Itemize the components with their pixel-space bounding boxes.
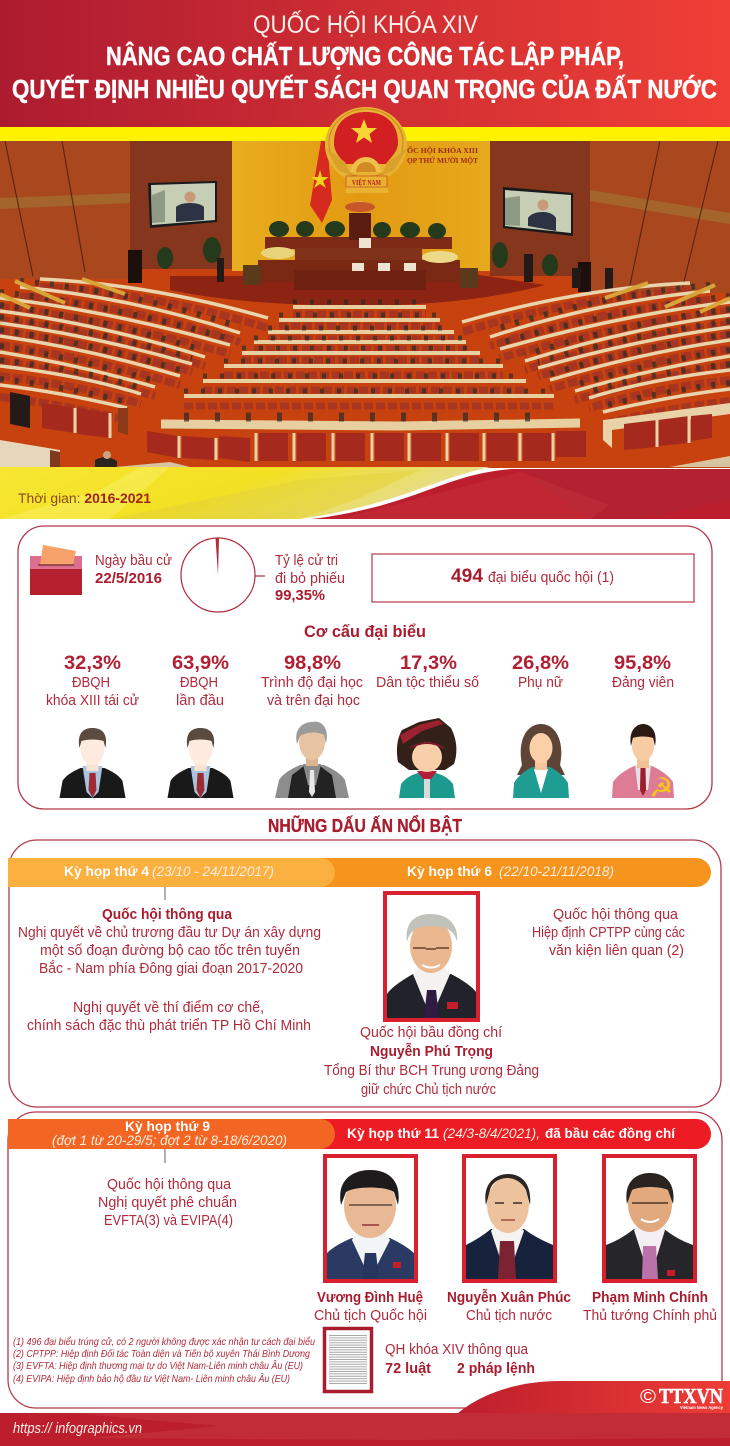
front row chairs [10, 392, 730, 462]
portrait: Nguyễn Xuân Phúc [464, 1156, 555, 1281]
laws passed: QH khóa XIV thông qua [385, 1341, 529, 1358]
session bar: Kỳ họp thứ 6 [407, 863, 492, 879]
icon: woman [513, 724, 569, 798]
title: NÂNG CAO CHẤT LƯỢNG CÔNG TÁC LẬP PHÁP, [106, 41, 624, 71]
session bar [8, 858, 711, 887]
stat: party members [612, 653, 674, 691]
stat: first time: ĐBQH [180, 674, 218, 691]
stat: higher education [261, 653, 363, 709]
footnotes [13, 1336, 315, 1385]
session bar: Kỳ họp thứ 11 [347, 1125, 439, 1141]
deputies count box [372, 554, 694, 602]
laws passed: 72 luật [385, 1360, 431, 1377]
icon: man in suit 2 [168, 728, 234, 798]
logo: TTXVN [640, 1384, 723, 1410]
stat: first time: 63,9% [172, 653, 229, 674]
stat: re-elected [46, 653, 139, 709]
left screen [148, 181, 217, 228]
session bar: đã bầu các đồng chí [545, 1125, 676, 1141]
right seating block [462, 283, 730, 424]
election date: Ngày bầu cử [95, 552, 172, 569]
session 6 text: Hiệp định CPTPP cùng các [532, 924, 685, 941]
election text: Quốc hội bầu đồng chí [360, 1024, 503, 1041]
header banner [0, 0, 730, 127]
session bar: (24/3-8/4/2021), [443, 1125, 540, 1141]
portrait: Nguyễn Phú Trọng [385, 893, 478, 1020]
icon: party member: ☭ [649, 773, 673, 804]
election text: Tổng Bí thư BCH Trung ương Đảng [324, 1062, 539, 1079]
stat: women: 26,8% [512, 653, 569, 674]
wall inscription: ỐC HỘI KHÓA XIII [407, 145, 478, 155]
session bar: (đợt 1 từ 20-29/5; đợt 2 từ 8-18/6/2020) [52, 1132, 287, 1148]
session 6 text: Quốc hội thông qua [553, 906, 679, 923]
stat: higher education: 98,8% [284, 653, 341, 674]
left side chairs [10, 392, 128, 438]
stat: first time: lần đầu [176, 692, 224, 709]
panel: sessions 4 and 6 [8, 840, 721, 1107]
portrait: Vương Đình Huệ [325, 1156, 416, 1281]
session 4 text: Nghị quyết về thí điểm cơ chế, [73, 999, 264, 1016]
election date [95, 552, 172, 587]
icon: party member [612, 724, 674, 804]
turnout text: Tỷ lệ cử tri [275, 552, 338, 569]
wall inscription [407, 145, 478, 165]
footer url: https:// infographics.vn [13, 1420, 142, 1437]
session 4 text [18, 906, 321, 1034]
national emblem: VIỆT NAM [352, 179, 381, 187]
session bar: Kỳ họp thứ 4 [64, 863, 149, 879]
footnotes: (3) EVFTA: Hiệp định thương mại tự do Việt Nam-Liên minh châu Âu (EU) [13, 1359, 303, 1372]
logo: TTXVN: Vietnam News Agency [680, 1405, 723, 1410]
session 6 text [532, 906, 685, 959]
stat: re-elected: ĐBQH [72, 674, 110, 691]
session 4 text: một số đoạn đường bộ cao tốc trên tuyến [40, 942, 300, 959]
photo: National Assembly hall [0, 141, 730, 468]
stat: re-elected: 32,3% [64, 653, 121, 674]
portrait: Phạm Minh Chính [604, 1156, 695, 1281]
stat: first time [172, 653, 229, 709]
captions: leaders [314, 1289, 717, 1324]
session 9 text: Quốc hội thông qua [107, 1176, 232, 1193]
section heading: highlights: NHỮNG DẤU ẤN NỔI BẬT [268, 815, 462, 836]
captions: leaders: Thủ tướng Chính phủ [583, 1307, 717, 1324]
deputies count box: đại biểu quốc hội (1) [488, 569, 614, 586]
stat: higher education: và trên đại học [267, 692, 360, 709]
laws passed: 2 pháp lệnh [457, 1360, 535, 1377]
flag [310, 141, 332, 223]
stat: party members: Đảng viên [612, 674, 674, 691]
session 4 text: Nghị quyết về chủ trương đầu tư Dự án xây dựng [18, 924, 321, 941]
stat: women [512, 653, 569, 691]
laws passed [385, 1341, 535, 1377]
time band [0, 467, 730, 519]
deputies count box: 494 [451, 566, 483, 587]
session 6 text: văn kiện liên quan (2) [549, 942, 684, 959]
stat: ethnic minorities [376, 653, 480, 691]
icon: grey haired man [275, 722, 349, 798]
national emblem [325, 107, 407, 193]
panel: election and composition [18, 526, 712, 809]
turnout text: đi bỏ phiếu [275, 570, 345, 587]
captions: leaders: Vương Đình Huệ [317, 1289, 423, 1306]
time label: Thời gian: 2016-2021 [18, 490, 151, 506]
captions: leaders: Chủ tịch nước [466, 1307, 552, 1324]
people standing on stage [217, 254, 613, 292]
session 4 text: chính sách đặc thù phát triển TP Hồ Chí Minh [27, 1017, 311, 1034]
yellow stripe [0, 127, 730, 141]
icon: ballot box [30, 545, 82, 595]
election text [324, 1024, 539, 1098]
footnotes: (2) CPTPP: Hiệp định Đối tác Toàn diện và Tiến bộ xuyên Thái Bình Dương [13, 1348, 310, 1360]
pie chart: turnout 99.35% [181, 538, 265, 612]
stat: ethnic minorities: 17,3% [400, 653, 457, 674]
captions: leaders: Phạm Minh Chính [592, 1289, 708, 1306]
stat: party members: 95,8% [614, 653, 671, 674]
captions: leaders: Nguyễn Xuân Phúc [447, 1289, 571, 1306]
title: QUỐC HỘI KHÓA XIV [253, 9, 478, 39]
icon: law document [324, 1328, 372, 1392]
left seating block [0, 279, 268, 420]
right side chairs [603, 403, 730, 450]
captions: leaders: Chủ tịch Quốc hội [314, 1307, 427, 1324]
turnout text [275, 552, 345, 604]
bottom corner desks [0, 440, 730, 467]
icon: man in suit [60, 728, 126, 798]
plants [157, 221, 558, 276]
icon: ethnic minority woman [397, 718, 456, 798]
footnotes: (1) 496 đại biểu trúng cử, có 2 người không được xác nhận tư cách đại biểu [13, 1336, 315, 1348]
centre seating block [161, 302, 580, 426]
session bar [8, 1118, 711, 1149]
session bar: (22/10-21/11/2018) [499, 863, 614, 879]
stat: women: Phụ nữ [518, 674, 563, 691]
title [12, 9, 717, 104]
logo: TTXVN: © [640, 1387, 656, 1408]
turnout text: 99,35% [275, 587, 325, 604]
election text: Nguyễn Phú Trọng [370, 1043, 493, 1060]
stage [170, 201, 545, 306]
wall inscription: ỌP THỨ MƯỜI MỘT [407, 155, 478, 165]
footnotes: (4) EVIPA: Hiệp định bảo hộ đầu tư Việt Nam- Liên minh châu Âu (EU) [13, 1372, 290, 1385]
heading: composition: Cơ cấu đại biểu [304, 622, 426, 641]
session 9 text [98, 1176, 237, 1229]
session 9 text: EVFTA(3) và EVIPA(4) [104, 1212, 233, 1229]
election text: giữ chức Chủ tịch nước [361, 1081, 496, 1098]
right screen [503, 187, 573, 236]
session 4 text: Bắc - Nam phía Đông giai đoạn 2017-2020 [39, 960, 303, 977]
footer band [0, 1381, 730, 1446]
photo walls [0, 141, 730, 293]
session 4 text: Quốc hội thông qua [102, 906, 233, 923]
stat: ethnic minorities: Dân tộc thiểu số [376, 674, 480, 691]
session 9 text: Nghị quyết phê chuẩn [98, 1194, 237, 1211]
session bar: (23/10 - 24/11/2017) [152, 863, 274, 879]
stat: re-elected: khóa XIII tái cử [46, 692, 139, 709]
election date: 22/5/2016 [95, 570, 162, 587]
stat: higher education: Trình độ đại học [261, 674, 363, 691]
session bar: Kỳ họp thứ 9 [125, 1118, 210, 1134]
panel: sessions 9 and 11 [8, 1112, 722, 1408]
